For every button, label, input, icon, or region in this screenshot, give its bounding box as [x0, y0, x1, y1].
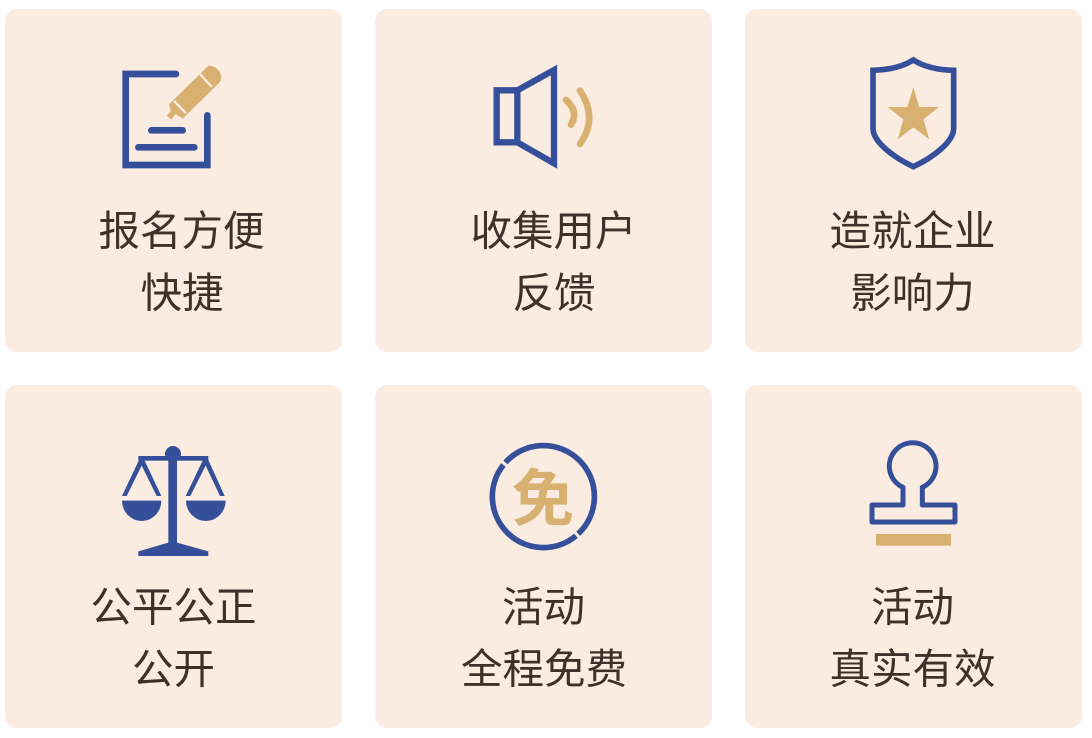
- text: 公平公正 公开: 公开: [132, 646, 215, 693]
- text: 收集用户 反馈: [470, 208, 637, 317]
- panel: 报名方便快捷: [5, 9, 342, 352]
- icon: free badge: [492, 446, 594, 548]
- text: 造就企业 影响力: 造就企业: [829, 208, 996, 255]
- text: 造就企业 影响力: [829, 208, 996, 317]
- text: 收集用户 反馈: 反馈: [512, 270, 596, 317]
- text: 收集用户 反馈: 收集用户: [470, 208, 637, 255]
- icon: speaker: [497, 70, 589, 163]
- text: 造就企业 影响力: 影响力: [850, 270, 975, 317]
- panel: 造就企业影响力: [745, 9, 1082, 352]
- icon: stamp: [872, 443, 955, 546]
- text: 报名方便 快捷: [98, 208, 265, 317]
- text: 报名方便 快捷: 快捷: [140, 270, 224, 317]
- icon: balance scale: [122, 446, 226, 556]
- text: 公平公正 公开: 公平公正: [90, 584, 257, 631]
- panel: 公平公正公开: [5, 385, 342, 728]
- text: 活动 全程免费: 全程免费: [461, 646, 627, 693]
- panel: 收集用户反馈: [375, 9, 712, 352]
- text: 报名方便 快捷: 报名方便: [98, 208, 265, 255]
- text: 活动 真实有效: 真实有效: [829, 646, 996, 693]
- panel: 活动真实有效: [745, 385, 1082, 728]
- text: 活动 真实有效: [829, 584, 996, 693]
- icon: shield with star: [873, 60, 954, 167]
- panel: 活动全程免费: [375, 385, 712, 728]
- icon: form and pencil: [126, 66, 221, 165]
- icon: free badge: 免: [512, 466, 574, 534]
- text: 活动 真实有效: 活动: [871, 584, 954, 631]
- text: 活动 全程免费: 活动: [502, 584, 585, 631]
- text: 活动 全程免费: [461, 584, 627, 693]
- text: 公平公正 公开: [90, 584, 257, 693]
